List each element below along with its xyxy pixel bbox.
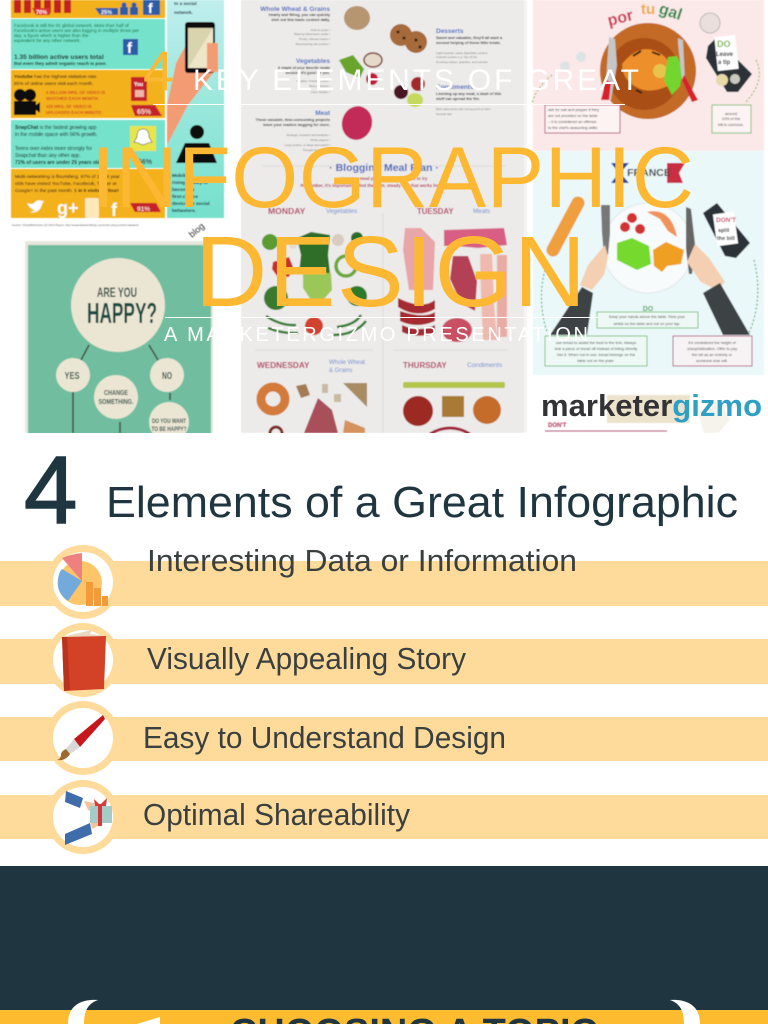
food: bagel and grains	[261, 383, 367, 439]
heading: blogging meal plan: · Blogging Meal Plan ·	[329, 162, 439, 174]
panel: social media statistics infographic: Facebook is still the #1 global network. More than half of	[14, 23, 129, 28]
title block: 4 key elements of great infographic design	[91, 39, 694, 346]
callout: around 10 percent: 10% of the	[722, 116, 740, 121]
panel: blogging meal plan infographic: stuff can spread the fire.	[436, 97, 480, 101]
item: interesting data: Interesting Data or Information	[147, 543, 577, 578]
food: vegetables	[339, 55, 364, 78]
panel: social media statistics infographic: equivalent for any other network.	[14, 38, 81, 43]
callout: unsophistication	[673, 336, 752, 366]
heading: france: FRANCE	[627, 167, 671, 179]
list: four elements	[0, 543, 768, 854]
panel: social media statistics infographic: 4 BILLION HRS. OF VIDEO IS	[46, 90, 105, 95]
panel: portugal dining etiquette	[532, 0, 764, 151]
illustration: plate and french meal	[550, 203, 750, 335]
illustration: person with phone	[176, 125, 217, 163]
illustration: plate with chicken	[600, 23, 698, 119]
panel: blogging meal plan infographic: Bold statements with strong point of view	[436, 107, 491, 111]
food: grains	[344, 6, 370, 30]
panel: blogging meal plan infographic: White papers ▪	[310, 138, 330, 142]
panel: blogging meal plan infographic: Desserts	[436, 28, 464, 35]
panel: social media statistics infographic: Mobile is	[172, 173, 193, 179]
illustration: dont split the bill: the bill	[717, 236, 735, 242]
panel: blogging meal plan infographic: Vegetables	[326, 208, 357, 215]
panel: social media statistics infographic: You	[134, 82, 143, 88]
label: thursday condiments: THURSDAY	[403, 361, 447, 370]
panel: social media statistics infographic: 1.35 billion active users total	[14, 54, 104, 61]
panel: blogging meal plan infographic: Sharing influencers' posts ▪	[294, 32, 330, 36]
callout: use bread to assist: table not on the plate.	[577, 358, 615, 363]
panel: are you happy poster: NO	[162, 371, 172, 382]
item: easy to understand design	[0, 701, 768, 775]
heading: portugal: por	[606, 7, 635, 30]
panel behind logo: further etiquette tips: DON'T	[548, 423, 567, 429]
banner: choosing a topic	[0, 1000, 768, 1024]
item: visually appealing story	[0, 623, 768, 697]
panel: blogging meal plan infographic: Sweet and valuable, they'll all want a	[436, 36, 503, 40]
panel: social media statistics infographic: 91%	[137, 206, 150, 213]
heading: 4 elements of a great infographic: 4	[24, 437, 77, 544]
panel: social media statistics infographic: g+	[57, 198, 79, 218]
panel: social media statistics infographic: to a social	[174, 1, 196, 6]
panel: social media statistics infographic: Multi-networking is flourishing. 97% of 16-64 year	[15, 174, 120, 180]
panel: blogging meal plan infographic: because it's good for you.	[286, 71, 330, 75]
panel: france dining etiquette	[533, 151, 764, 433]
panel: blogging meal plan infographic: Amusing videos, graphics, and memes	[436, 60, 488, 64]
subtitle: a marketergizmo presentation: A MARKETERGIZMO PRESENTATION	[164, 324, 588, 346]
panel: blogging meal plan infographic: Vegetables	[296, 58, 330, 65]
panel: are you happy poster: DO YOU WANT	[152, 418, 186, 425]
panel: blogging meal plan infographic: Hearty and filling, you can quickly	[269, 13, 331, 17]
panel: blogging meal plan infographic: Timely, relevant topics ▪	[299, 37, 330, 41]
food: salami	[341, 106, 373, 140]
illustration: do leave a tip: a tip	[718, 60, 731, 66]
heading: portugal: tu	[641, 1, 655, 18]
callout: around 10 percent	[712, 105, 751, 133]
title: design: DESIGN	[195, 216, 586, 328]
panel: are you happy poster: YES	[64, 371, 80, 382]
callout: unsophistication: someone else will.	[696, 358, 728, 363]
panel: blogging meal plan infographic: dish out this basic content daily.	[271, 18, 330, 22]
panel: social media statistics infographic: But even they admit organic reach is poor.	[14, 61, 107, 66]
item: interesting data	[0, 543, 768, 619]
panel: social media statistics infographic: network.	[174, 10, 193, 15]
panel: social media statistics infographic: 65%	[137, 109, 152, 116]
panel: blogging meal plan infographic: Livening up any meal, a dash of this	[436, 92, 501, 96]
panel: are you happy poster	[25, 221, 213, 442]
panel: social media statistics infographic: olds have visited YouTube, Facebook, Twitter or	[15, 181, 117, 187]
callout: use bread to assist: use bread to assist the food to the fork. Always	[556, 340, 636, 345]
kicker: key elements of great: KEY ELEMENTS OF GREAT	[193, 64, 639, 97]
panel: blogging meal plan infographic: A staple of your favorite meals	[278, 66, 330, 70]
panel: social media statistics infographic: Youtube has the highest visitation rate.	[14, 74, 98, 80]
panel: are you happy poster: TO BE HAPPY?	[152, 426, 187, 433]
bracket: right	[670, 1000, 700, 1024]
panel: blogging meal plan infographic: Thought leadership ▪	[302, 148, 330, 152]
label: tuesday meats: TUESDAY	[417, 207, 454, 216]
panel: blogging meal plan infographic: Condiments	[467, 362, 503, 369]
icon: hands passing gift	[65, 791, 112, 845]
callout: ask for salt and pepper: are not provided on the table	[548, 113, 598, 118]
callout: ask for salt and pepper: – it is considered an offense	[548, 119, 596, 124]
food: meat arrangement	[398, 228, 507, 342]
food: condiments	[394, 85, 408, 99]
illustration: hand holding phone	[167, 22, 218, 145]
panel: social media statistics infographic: Teens over-index more strongly for	[15, 146, 92, 152]
callout: around 10 percent: around	[725, 111, 737, 116]
panel: blogging meal plan infographic: Neutral rate	[436, 112, 452, 116]
panel: social media statistics infographic: 56%	[138, 159, 153, 166]
panel: social media statistics infographic: Source: GlobalWebIndex Q3 2014 Report, http://expandedramblings.com/index.php/youtube-statistics/	[12, 223, 139, 227]
panel: blogging meal plan infographic: Meat	[315, 110, 331, 117]
bracket: left	[68, 1000, 98, 1024]
panel: social media statistics infographic: device for social	[172, 201, 210, 207]
panel: social media statistics infographic: 100 HRS. OF VIDEO IS	[46, 104, 92, 109]
panel: social media statistics infographic: Facebook's active users are also logging in multiple times per	[14, 28, 139, 33]
panel: blogging meal plan infographic: Strategic research and analysis ▪	[286, 133, 330, 137]
item: optimal shareability: Optimal Shareability	[143, 797, 410, 832]
panel: blogging meal plan infographic: Whole Wheat & Grains	[260, 6, 330, 13]
panel: are you happy poster: blog	[187, 221, 206, 240]
panel: social media statistics infographic: Google+ in the past month. 1 in 5 visits all four!	[15, 188, 119, 194]
panel: blogging meal plan infographic: Light-hearted, easily digestible content	[436, 51, 487, 55]
panel: blogging meal plan infographic: Condiments	[436, 84, 474, 91]
panel: social media statistics infographic: SnapChat is the fastest growing app	[15, 125, 97, 131]
label: wednesday whole wheat and grains: WEDNESDAY	[257, 361, 310, 370]
illustration: do leave a tip	[706, 35, 752, 92]
panel: blogging meal plan infographic: Cultural content e.g. Top 10 list	[436, 55, 477, 59]
callout: use bread to assist: into it. When not in use, bread belongs on the	[557, 352, 635, 357]
heading: portugal	[608, 4, 683, 30]
panel: dark section	[0, 866, 768, 1024]
label: monday vegetables: MONDAY	[268, 206, 306, 216]
callout: unsophistication: It's considered the height of	[688, 340, 737, 345]
icon: pie chart with bars	[58, 553, 108, 606]
panel: are you happy poster: CHANGE	[104, 388, 128, 397]
callout: ask for salt and pepper: ask for salt and pepper if they	[548, 107, 599, 112]
panel: blogging meal plan infographic: & Grains	[329, 368, 352, 374]
illustration: do leave a tip: Leave	[716, 52, 734, 58]
panel: blogging meal plan infographic	[241, 0, 527, 439]
title: infographic: INFOGRAPHIC	[91, 130, 694, 226]
panel: blogging meal plan infographic: Whole Wheat	[329, 360, 365, 366]
panel: blogging meal plan infographic: These valuable, time-consuming projects	[256, 118, 330, 122]
panel: social media statistics infographic: 70%	[36, 10, 47, 16]
callout: do keep hands above table: Keep your hands above the table. Rest your	[609, 314, 686, 319]
icon: paintbrush	[57, 715, 105, 760]
panel: are you happy poster: ARE YOU	[97, 284, 137, 300]
panel: social media statistics infographic: first-choice	[172, 194, 198, 200]
panel: blogging meal plan infographic: Insights ▪ Industry news ▪	[297, 79, 330, 83]
panel: blogging meal plan infographic: Meats	[473, 208, 490, 215]
heading: france	[611, 163, 685, 183]
heading: 4 elements of a great infographic: Elements of a Great Infographic	[106, 478, 738, 527]
number: 1	[137, 1017, 160, 1024]
panel: social media statistics infographic: 71% of users are under 25 years old.	[15, 160, 102, 166]
panel: social media statistics infographic: f	[111, 200, 118, 220]
callout: do keep hands above table: DO	[643, 306, 654, 313]
panel: social media statistics infographic: day, a figure which is higher than the	[14, 33, 89, 38]
number 4: 4	[143, 39, 174, 102]
panel: are you happy poster: HAPPY?	[87, 298, 157, 330]
panel: social media statistics infographic: 25%	[101, 10, 112, 16]
heading: 4 elements of a great infographic	[24, 437, 738, 544]
callout: unsophistication: unsophistication. Offer to pay	[687, 346, 737, 351]
callout: use bread to assist	[545, 336, 647, 366]
icon: red book	[62, 630, 106, 691]
panel: social media statistics infographic: f	[148, 0, 153, 16]
panel: social media statistics infographic: in the mobile space with 56% growth.	[15, 132, 98, 138]
panel: blogging meal plan infographic: Case studies ▪	[311, 90, 330, 94]
panel: are you happy poster: SOMETHING.	[98, 397, 134, 406]
panel behind logo: further etiquette tips	[545, 395, 730, 433]
illustration: do leave a tip: DO	[717, 39, 730, 49]
panel: blogging meal plan infographic: second helping of these little treats.	[436, 41, 501, 45]
panel: social media statistics infographic: WATCHED EACH MONTH.	[46, 96, 99, 101]
panel: blogging meal plan infographic: Here is a meal plan designed for you to try	[341, 176, 428, 181]
item: visually appealing story: Visually Appealing Story	[147, 641, 466, 676]
panel: social media statistics infographic: Snapchat than any other app.	[15, 153, 81, 159]
panel: social media statistics infographic: become a	[172, 187, 194, 193]
panel: blogging meal plan infographic: Repurposing old content ▪	[296, 42, 330, 46]
panel: blogging meal plan infographic: How-to posts ▪	[311, 28, 330, 32]
item: easy to understand design: Easy to Understand Design	[143, 720, 506, 755]
callout: use bread to assist: tear a piece of bread off instead of biting directly	[555, 346, 637, 351]
food: cookies	[390, 24, 412, 46]
food: condiments row	[403, 382, 505, 434]
callout: do keep hands above table: wrists on the table and not on your lap.	[614, 321, 680, 326]
panel: photo collage of sample infographics	[11, 0, 764, 442]
panel: blogging meal plan infographic: leave your readers begging for more.	[263, 123, 330, 127]
panel: social media statistics infographic	[11, 0, 224, 227]
panel: blogging meal plan infographic: Remember, it's important to find the right, steady diet that works for your readers.	[301, 183, 467, 188]
logo: marketergizmo: marketergizmo	[541, 388, 762, 423]
panel: social media statistics infographic: f	[127, 40, 133, 57]
item: optimal shareability	[0, 780, 768, 854]
callout: around 10 percent: bill is common.	[718, 122, 744, 127]
panel: social media statistics infographic: behaviors.	[172, 208, 196, 214]
illustration: dont split the bill: DON'T	[716, 217, 736, 224]
illustration: dont split the bill	[703, 203, 750, 258]
panel: social media statistics infographic: UPLOADED EACH MINUTE.	[46, 110, 102, 115]
callout: unsophistication: the bill as an entirety or	[692, 352, 733, 357]
illustration: dont split the bill: split	[718, 228, 729, 234]
callout: ask for salt and pepper: to the chef's seasoning skills.	[548, 125, 598, 130]
panel: blogging meal plan infographic: Best practices ▪	[309, 84, 330, 88]
callout: ask for salt and pepper	[545, 105, 620, 133]
panel: blogging meal plan infographic: Long content, or large and useful ▪	[284, 143, 330, 147]
heading: portugal: gal	[657, 1, 684, 24]
food: vegetable arrangement	[262, 232, 367, 335]
panel: social media statistics infographic: 85% of online users visit each month.	[14, 81, 93, 87]
callout: do keep hands above table	[597, 306, 698, 328]
panel: social media statistics infographic: rising rapidly to	[172, 180, 208, 186]
